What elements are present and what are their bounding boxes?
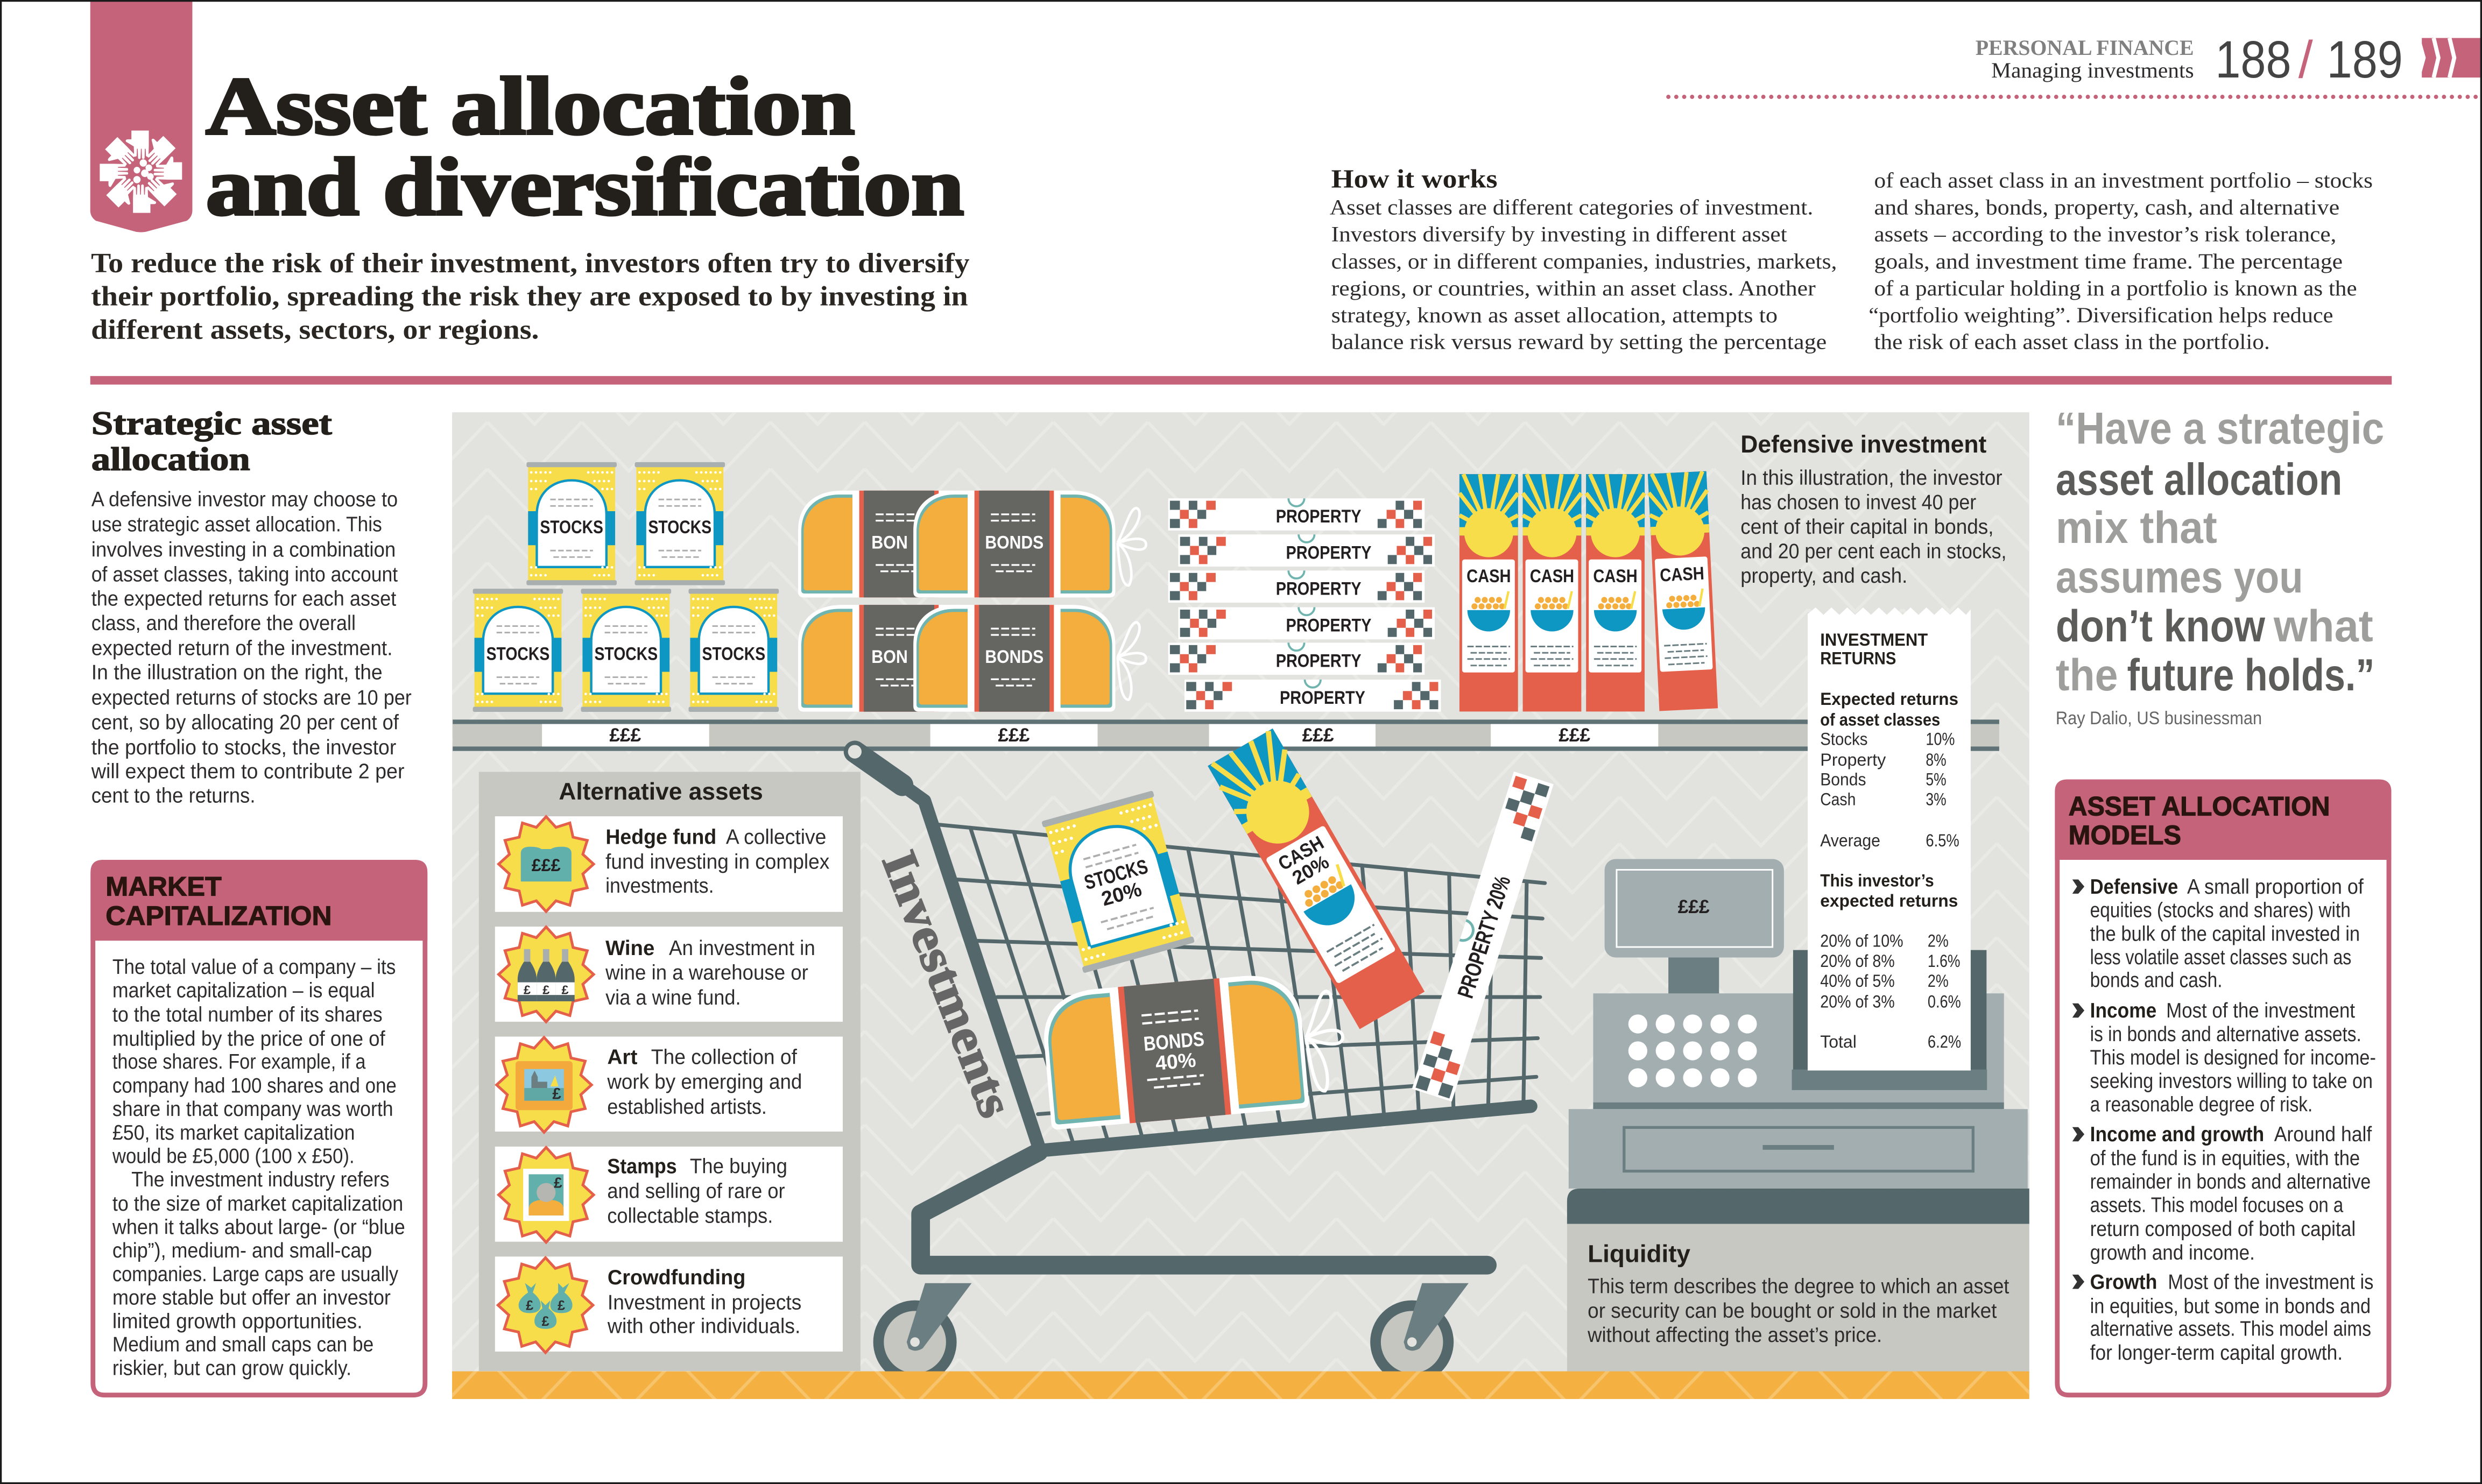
defensive investment text: and 20 per cent each in stocks,	[1740, 540, 2006, 563]
body text: class, and therefore the overall	[91, 612, 356, 635]
card: wine	[495, 927, 843, 1022]
card: crowdfunding: Investment in projects	[608, 1291, 801, 1314]
receipt text: Stocks	[1820, 730, 1867, 749]
receipt text: 1.6%	[1928, 951, 1960, 971]
screen	[1605, 859, 1784, 994]
cart item: bonds 40%: BONDS	[1143, 1027, 1205, 1055]
box	[1168, 498, 1425, 531]
receipt text: 8%	[1926, 750, 1947, 769]
card: hedge fund: fund investing in complex	[605, 850, 829, 873]
icon: wine badge	[499, 927, 594, 1022]
cart item: bonds 40%: 40%	[1154, 1048, 1197, 1075]
loaf: BONDS	[985, 647, 1043, 667]
item: income and growth: return composed of both capital	[2090, 1218, 2356, 1241]
panel: market capitalization	[90, 860, 427, 1395]
body text: share in that company was worth	[112, 1098, 393, 1121]
body text: cent to the returns.	[91, 785, 255, 808]
body text: the expected returns for each asset	[91, 587, 396, 610]
basket wires	[937, 824, 1545, 1146]
can	[581, 589, 671, 712]
defensive investment text: cent of their capital in bonds,	[1740, 515, 1994, 539]
pull quote: don’t know	[2056, 600, 2266, 651]
intro text: To reduce the risk of their investment, investors often try to diversify	[91, 248, 970, 279]
body text: riskier, but can grow quickly.	[112, 1356, 351, 1380]
how it works	[1330, 165, 2373, 354]
box	[1459, 474, 1518, 711]
pull quote: asset allocation	[2056, 454, 2342, 504]
loaf: BON	[871, 647, 908, 667]
card: stamps: and selling of rare or	[607, 1180, 785, 1203]
item: growth	[2072, 1270, 2373, 1365]
box	[1168, 570, 1425, 603]
receipt text: of asset classes	[1820, 710, 1940, 729]
can: STOCKS	[540, 517, 603, 538]
receipt text: 0.6%	[1928, 992, 1961, 1011]
liquidity text: without affecting the asset’s price.	[1587, 1324, 1882, 1347]
can	[526, 462, 617, 585]
can: STOCKS	[486, 644, 549, 664]
icon: crowdfunding badge: £	[526, 1298, 533, 1313]
item: income and growth: Income and growth	[2090, 1123, 2264, 1146]
heading	[2069, 791, 2330, 850]
body text	[91, 488, 412, 808]
body text	[112, 956, 405, 1380]
icon: wine badge: £	[562, 983, 569, 997]
liquidity panel	[1567, 1189, 2029, 1372]
receipt text	[1820, 630, 1961, 1051]
can: STOCKS	[595, 644, 658, 664]
pull quote	[2056, 403, 2384, 729]
receipt text: 10%	[1926, 730, 1955, 749]
body text: to the size of market capitalization	[112, 1192, 403, 1216]
heading: MODELS	[2069, 820, 2181, 850]
box	[1648, 471, 1718, 711]
box: PROPERTY	[1280, 688, 1365, 708]
card: wine: Wine	[605, 937, 654, 960]
title	[206, 61, 964, 233]
price tag	[1209, 724, 1376, 746]
body text: chip”), medium- and small-cap	[112, 1239, 372, 1262]
body text: Medium and small caps can be	[112, 1333, 373, 1356]
alternative assets panel: Alternative assets	[559, 779, 763, 805]
can	[689, 589, 779, 712]
liquidity panel: Liquidity	[1588, 1240, 1691, 1267]
defensive investment text: has chosen to invest 40 per	[1740, 491, 1976, 514]
receipt text: 2%	[1928, 971, 1949, 991]
body text: market capitalization – is equal	[112, 979, 375, 1002]
page header: section and page numbers	[1976, 30, 2482, 89]
drawer	[1569, 1109, 2028, 1189]
icon: hedge fund badge	[499, 817, 594, 911]
how it works: How it works	[1331, 165, 1497, 194]
can	[635, 462, 725, 585]
defensive investment text: property, and cash.	[1740, 564, 1907, 588]
receipt text: Cash	[1820, 790, 1856, 809]
screen: £££	[1678, 896, 1710, 917]
can: STOCKS	[702, 644, 765, 664]
card: wine: wine in a warehouse or	[605, 962, 808, 985]
loaf: BON	[871, 532, 908, 553]
card: stamps: Stamps	[607, 1155, 677, 1178]
ribbon with hands icon	[90, 0, 192, 232]
body text: involves investing in a combination	[91, 538, 396, 561]
card: art: Art	[607, 1046, 638, 1069]
can	[473, 589, 563, 712]
how it works: goals, and investment time frame. The percentage	[1874, 249, 2343, 273]
page header: section and page numbers: PERSONAL FINANCE	[1976, 36, 2194, 60]
body text: more stable but offer an investor	[112, 1286, 391, 1309]
body text: use strategic asset allocation. This	[91, 513, 382, 536]
card: art: established artists.	[607, 1096, 767, 1119]
item: defensive: less volatile asset classes such as	[2090, 946, 2351, 969]
cart item: cash 20%: CASH	[1274, 832, 1328, 875]
box	[1179, 534, 1435, 567]
stocks cans on shelf	[473, 462, 779, 712]
orange floor	[452, 1372, 2029, 1399]
body text: expected return of the investment.	[91, 637, 392, 660]
receipt text: 20% of 8%	[1820, 951, 1895, 971]
card: hedge fund: Hedge fund	[605, 825, 716, 849]
alternative assets panel	[479, 772, 861, 1371]
defensive investment text: In this illustration, the investor	[1740, 467, 2002, 490]
card: wine: An investment in	[669, 937, 815, 960]
receipt text: 3%	[1926, 790, 1947, 809]
card: hedge fund	[495, 816, 843, 912]
item: growth: for longer-term capital growth.	[2090, 1341, 2343, 1365]
box	[1168, 642, 1425, 675]
icon: crowdfunding badge: £	[542, 1314, 549, 1329]
cart item: cash 20%: 20%	[1288, 851, 1332, 889]
heading	[105, 872, 332, 931]
can: STOCKS	[648, 517, 711, 538]
item: income and growth: growth and income.	[2090, 1241, 2255, 1264]
bonds loaves on shelf	[798, 491, 1146, 712]
item: defensive: A small proportion of	[2187, 875, 2364, 899]
item: income and growth: remainder in bonds and alternative	[2090, 1170, 2371, 1193]
receipt text: expected returns	[1820, 891, 1958, 910]
intro text: different assets, sectors, or regions.	[91, 314, 539, 345]
receipt text: INVESTMENT	[1820, 630, 1928, 649]
title: and diversification	[206, 142, 964, 233]
page header: section and page numbers: 189	[2327, 30, 2403, 89]
card: crowdfunding: with other individuals.	[607, 1315, 800, 1338]
box: CASH	[1593, 566, 1638, 586]
receipt text: 40% of 5%	[1820, 971, 1895, 991]
item: growth: in equities, but some in bonds and	[2090, 1295, 2371, 1318]
loaf	[798, 605, 1031, 712]
how it works: Investors diversify by investing in different asset	[1331, 222, 1787, 246]
item: income and growth: of the fund is in equities, with the	[2090, 1147, 2360, 1170]
receipt text: Bonds	[1820, 769, 1866, 789]
body text: £50, its market capitalization	[112, 1121, 355, 1144]
card: wine: via a wine fund.	[605, 986, 741, 1009]
body text: the portfolio to stocks, the investor	[91, 736, 396, 759]
property boxes on shelf	[1168, 498, 1441, 712]
box	[1179, 607, 1435, 639]
strategic asset allocation text	[91, 405, 412, 808]
item: income: Income	[2090, 999, 2156, 1022]
how it works: classes, or in different companies, industries, markets,	[1331, 249, 1837, 273]
pull quote: future holds.”	[2127, 649, 2375, 700]
item: income: is in bonds and alternative assets.	[2090, 1023, 2361, 1046]
cart item: property 20%	[1412, 772, 1554, 1101]
register body	[1593, 950, 2004, 1109]
receipt text: 20% of 10%	[1820, 931, 1903, 950]
cash boxes on shelf	[1459, 471, 1718, 711]
how it works: and shares, bonds, property, cash, and alternative	[1874, 195, 2339, 220]
pull quote: the	[2056, 649, 2118, 700]
item: income and growth: assets. This model focuses on a	[2090, 1193, 2344, 1217]
icon: stamp badge: £	[554, 1174, 562, 1191]
title: Asset allocation	[206, 61, 855, 152]
body text: A defensive investor may choose to	[91, 488, 398, 511]
how it works: “portfolio weighting”. Diversification helps reduce	[1868, 303, 2333, 327]
icon: wine badge: £	[524, 983, 531, 997]
loaf: BONDS	[985, 532, 1043, 553]
receipt text: 6.2%	[1928, 1032, 1961, 1051]
item: income: Most of the investment	[2166, 999, 2355, 1022]
icon: crowdfunding badge	[498, 1257, 593, 1353]
receipt text: Expected returns	[1820, 689, 1958, 709]
icon: stamp badge	[499, 1147, 594, 1242]
loaf	[913, 605, 1146, 712]
icon: page arrow	[2420, 38, 2482, 77]
icon: crowdfunding badge: £	[558, 1298, 565, 1313]
shelf	[453, 719, 1999, 751]
how it works: Asset classes are different categories of investment.	[1330, 195, 1813, 220]
pull quote: assumes you	[2056, 552, 2303, 602]
icon: art badge: £	[552, 1085, 561, 1103]
frame	[855, 752, 1531, 1265]
price tag	[1491, 724, 1658, 746]
page header: section and page numbers: 188	[2215, 30, 2291, 89]
how it works: of a particular holding in a portfolio is known as the	[1874, 276, 2357, 300]
liquidity text	[1587, 1275, 2009, 1347]
body text: will expect them to contribute 2 per	[91, 760, 405, 783]
pull quote: what	[2273, 600, 2373, 651]
body text: multiplied by the price of one of	[112, 1027, 385, 1050]
pink rule	[90, 376, 2392, 385]
how it works: balance risk versus reward by setting the percentage	[1331, 330, 1827, 354]
wheels	[878, 1283, 1469, 1379]
box	[1184, 680, 1441, 712]
body text: of asset classes, taking into account	[91, 563, 398, 586]
item: income: a reasonable degree of risk.	[2090, 1093, 2312, 1116]
cart item: stocks 20%: STOCKS	[1082, 855, 1150, 894]
box: CASH	[1659, 563, 1705, 586]
receipt text: Average	[1820, 831, 1880, 850]
item: income: seeking investors willing to take on	[2090, 1070, 2373, 1093]
body text: companies. Large caps are usually	[112, 1263, 399, 1286]
page header: section and page numbers: Managing investments	[1991, 59, 2194, 82]
item: income and growth: Around half	[2274, 1123, 2372, 1146]
card: stamps: collectable stamps.	[607, 1204, 773, 1227]
shopping cart	[848, 745, 1545, 1379]
how it works: assets – according to the investor’s risk tolerance,	[1874, 222, 2336, 246]
heading: MARKET	[105, 872, 222, 902]
item: defensive: the bulk of the capital invested in	[2090, 922, 2360, 945]
liquidity text: or security can be bought or sold in the market	[1588, 1299, 1997, 1323]
box: PROPERTY	[1286, 542, 1372, 563]
strategic asset allocation text: allocation	[91, 441, 250, 477]
receipt text: 6.5%	[1926, 831, 1959, 850]
item: defensive: equities (stocks and shares) with	[2090, 899, 2351, 922]
card: art	[495, 1037, 843, 1132]
box	[1523, 474, 1581, 711]
item: income and growth	[2072, 1123, 2372, 1264]
defensive investment text	[1740, 430, 2006, 588]
card: art: The collection of	[651, 1046, 797, 1069]
price tag: £££	[609, 725, 641, 746]
icon: hands around coins	[100, 131, 182, 213]
panel: shop illustration	[452, 412, 2029, 1399]
body text: to the total number of its shares	[112, 1004, 383, 1027]
receipt text: RETURNS	[1820, 648, 1896, 668]
price tag: £££	[998, 725, 1030, 746]
icon: art badge	[497, 1037, 591, 1132]
card: crowdfunding: Crowdfunding	[608, 1266, 745, 1289]
defensive investment text: Defensive investment	[1740, 430, 1986, 458]
box: PROPERTY	[1276, 506, 1362, 527]
receipt text: 5%	[1926, 769, 1947, 789]
receipt text: Property	[1820, 750, 1886, 769]
card: art: work by emerging and	[607, 1071, 802, 1094]
how it works: regions, or countries, within an asset class. Another	[1331, 276, 1816, 300]
receipt text: 2%	[1928, 931, 1949, 950]
cart item: stocks 20%: 20%	[1099, 878, 1144, 910]
card: hedge fund: A collective	[726, 825, 826, 849]
box: PROPERTY	[1276, 651, 1362, 671]
item: defensive: bonds and cash.	[2090, 969, 2223, 992]
heading: CAPITALIZATION	[105, 901, 332, 931]
item: income: This model is designed for income-	[2090, 1047, 2376, 1070]
how it works: of each asset class in an investment portfolio – stocks	[1874, 168, 2373, 193]
cart item: stocks 20%	[1041, 790, 1195, 973]
cart item: property 20%: PROPERTY 20%	[1452, 873, 1515, 1001]
how it works: the risk of each asset class in the portfolio.	[1874, 330, 2270, 354]
strategic asset allocation text: Strategic asset	[91, 405, 332, 442]
box: CASH	[1466, 566, 1511, 586]
loaf	[913, 491, 1146, 597]
cart item: cash 20%	[1208, 729, 1425, 1029]
item: growth: Most of the investment is	[2168, 1270, 2373, 1294]
investments label: Investments	[872, 844, 1024, 1125]
body text: when it talks about large- (or “blue	[112, 1216, 405, 1239]
icon: hedge fund badge: £££	[532, 856, 561, 875]
box: CASH	[1530, 566, 1574, 586]
body text: cent, so by allocating 20 per cent of	[91, 711, 399, 734]
body text: limited growth opportunities.	[112, 1310, 363, 1333]
intro text: their portfolio, spreading the risk they are exposed to by investing in	[91, 281, 968, 312]
body text: those shares. For example, if a	[112, 1050, 366, 1073]
page header: section and page numbers: /	[2298, 30, 2313, 89]
box: PROPERTY	[1286, 616, 1372, 636]
price tag: £££	[1302, 725, 1334, 746]
icon: wine badge: £	[542, 983, 549, 997]
pull quote: mix that	[2056, 502, 2217, 553]
heading: ASSET ALLOCATION	[2069, 791, 2330, 821]
panel: asset allocation models	[2055, 780, 2391, 1395]
item: growth: alternative assets. This model aims	[2090, 1318, 2371, 1341]
card: stamps	[495, 1147, 843, 1242]
card: crowdfunding	[495, 1256, 843, 1353]
body text: The total value of a company – its	[112, 956, 396, 979]
intro text	[91, 248, 970, 345]
body text: would be £5,000 (100 x £50).	[112, 1145, 355, 1168]
dotted rule	[1668, 96, 2482, 97]
body text: expected returns of stocks are 10 per	[91, 686, 412, 709]
price tag: £££	[1559, 725, 1591, 746]
receipt text: 20% of 3%	[1820, 992, 1895, 1011]
cash register	[1569, 859, 2028, 1189]
pull quote: Ray Dalio, US businessman	[2056, 708, 2262, 729]
how it works: strategy, known as asset allocation, attempts to	[1331, 303, 1778, 327]
cart item: bonds 40%	[1040, 968, 1349, 1130]
liquidity text: This term describes the degree to which an asset	[1588, 1275, 2009, 1298]
pull quote: “Have a strategic	[2056, 403, 2384, 454]
body text: company had 100 shares and one	[112, 1075, 397, 1098]
item: defensive	[2072, 875, 2364, 992]
price tag	[930, 724, 1098, 746]
body text: In the illustration on the right, the	[91, 661, 383, 684]
receipt text: This investor’s	[1820, 871, 1934, 891]
price tag	[542, 724, 709, 746]
box: PROPERTY	[1276, 578, 1362, 599]
box	[1586, 474, 1645, 711]
receipt text: Total	[1820, 1032, 1857, 1051]
body text: The investment industry refers	[131, 1168, 390, 1191]
receipt: investment returns	[1808, 607, 1971, 1070]
loaf	[798, 491, 1031, 597]
item: income	[2072, 999, 2376, 1116]
item: defensive: Defensive	[2090, 875, 2178, 899]
item: growth: Growth	[2090, 1270, 2157, 1294]
card: hedge fund: investments.	[605, 874, 714, 898]
card: stamps: The buying	[690, 1155, 787, 1178]
